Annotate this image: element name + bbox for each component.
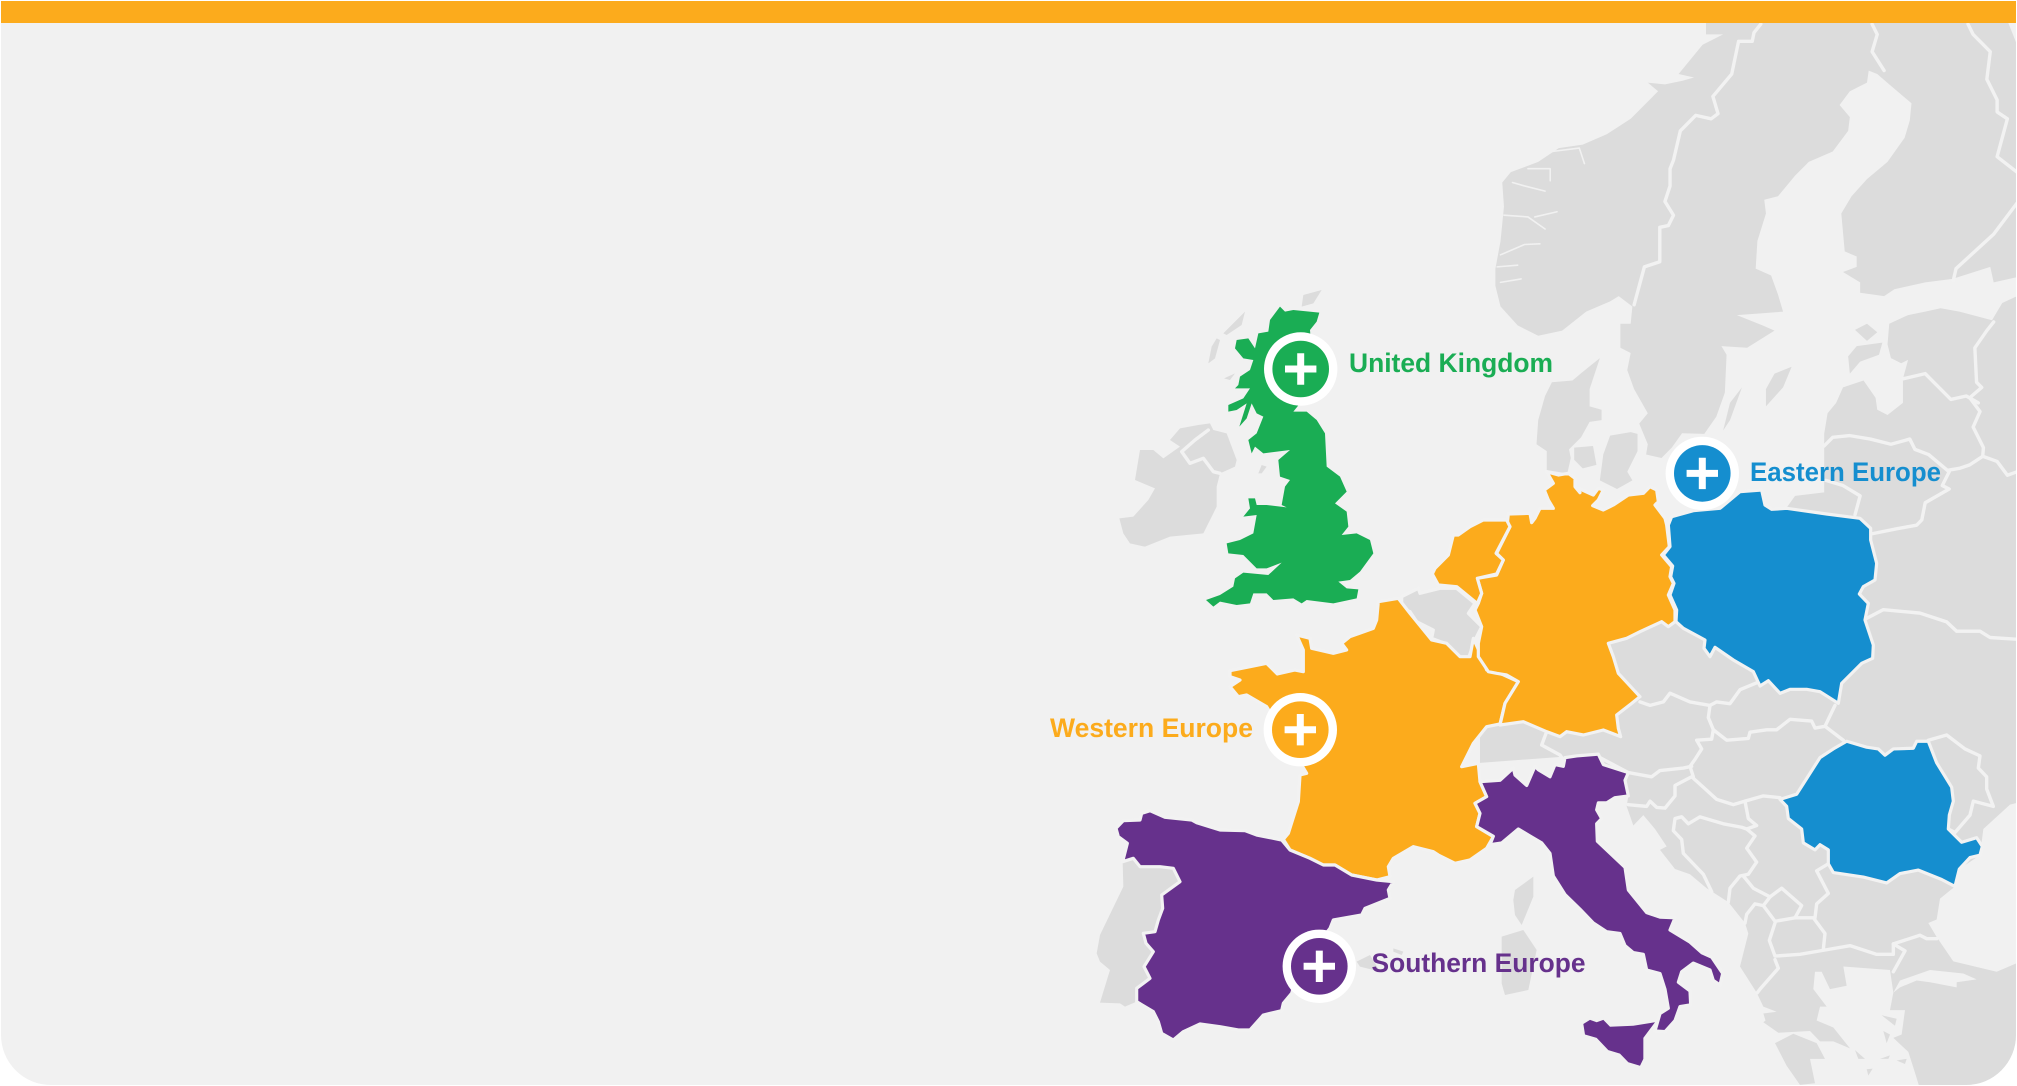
- country group: Western Europe (France, Germany, Netherlands): [1230, 472, 1675, 880]
- map of Europe: [1097, 21, 2017, 1086]
- country group: United Kingdom: [1206, 307, 1373, 607]
- grey land: Belgium and Switzerland borders: [1402, 588, 1563, 760]
- marker: Eastern Europe: [1666, 437, 1941, 510]
- Italy and Sicily: [1475, 754, 1723, 1066]
- grey land: Ireland and Scottish islands: [1119, 290, 1322, 547]
- marker: Southern Europe: [1283, 930, 1586, 1003]
- Netherlands: [1432, 520, 1510, 603]
- icon: plus button: [1666, 437, 1739, 510]
- label: Southern Europe: [1372, 948, 1586, 978]
- icon: plus button: [1283, 930, 1356, 1003]
- Germany: [1432, 472, 1675, 737]
- marker: Western Europe: [1050, 693, 1337, 766]
- icon: plus button: [1264, 332, 1337, 406]
- country group: Southern Europe (Spain, Italy): [1116, 754, 1723, 1066]
- grey land: Scandinavia, Baltics, Denmark: [1495, 21, 2017, 558]
- icon: plus button: [1264, 693, 1337, 766]
- country group: Eastern Europe (Poland, Romania): [1663, 490, 1982, 886]
- Romania: [1780, 741, 1982, 886]
- Poland: [1663, 490, 1877, 703]
- marker: United Kingdom: [1264, 332, 1553, 406]
- grey land: Portugal and Mediterranean islands: [1097, 858, 1537, 1007]
- label: Eastern Europe: [1750, 457, 1941, 487]
- France: [1230, 598, 1518, 880]
- grey land: central Europe, Balkans, Turkey: [1480, 540, 2017, 1086]
- Spain: [1116, 811, 1393, 1040]
- label: United Kingdom: [1349, 348, 1553, 378]
- label: Western Europe: [1050, 713, 1253, 743]
- top accent bar: [1, 1, 2016, 23]
